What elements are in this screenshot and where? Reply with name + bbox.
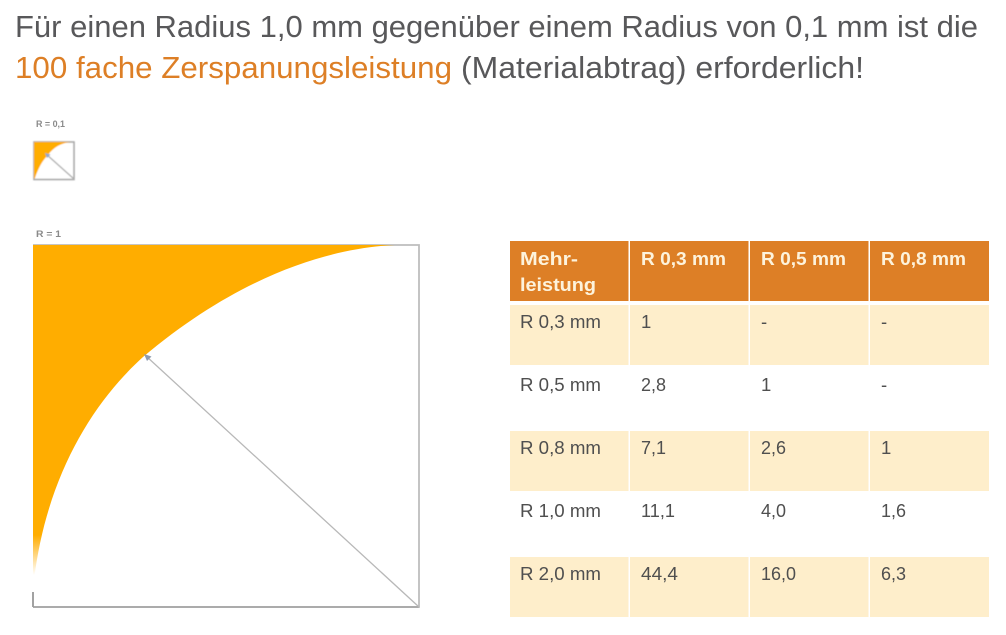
row R 0,5 mm: 2,8 — [641, 374, 666, 395]
row R 1,0 mm: 4,0 — [761, 500, 786, 521]
row R 2,0 mm: 16,0 — [761, 563, 796, 584]
row R 2,0 mm — [510, 557, 989, 617]
row R 0,8 mm: 2,6 — [761, 437, 786, 458]
table header row: Mehr- — [520, 248, 578, 269]
small diagram: R = 0,1 — [34, 119, 74, 180]
table header row: leistung — [520, 274, 596, 295]
row R 2,0 mm: 44,4 — [641, 563, 678, 584]
row R 0,5 mm: 1 — [761, 374, 771, 395]
row R 0,5 mm: R 0,5 mm — [520, 374, 601, 395]
row R 0,8 mm: 1 — [881, 437, 891, 458]
row R 1,0 mm: R 1,0 mm — [520, 500, 601, 521]
row R 0,3 mm: R 0,3 mm — [520, 311, 601, 332]
row R 0,5 mm — [520, 374, 887, 395]
row R 0,3 mm: 1 — [641, 311, 651, 332]
row R 1,0 mm: 11,1 — [641, 500, 675, 521]
large diagram: R = 1: R = 1 — [36, 229, 62, 240]
title: (Materialabtrag) erforderlich! — [461, 51, 864, 85]
table header row: R 0,3 mm — [641, 248, 726, 269]
row R 2,0 mm: R 2,0 mm — [520, 563, 601, 584]
title: 100 fache Zerspanungsleistung — [15, 51, 452, 85]
table header row: R 0,8 mm — [881, 248, 966, 269]
radius arrow — [144, 354, 419, 607]
row R 0,8 mm: R 0,8 mm — [520, 437, 601, 458]
orange removed-material area — [33, 245, 395, 580]
row R 1,0 mm — [520, 500, 906, 521]
large diagram: R = 1 — [33, 229, 419, 607]
row R 2,0 mm: 6,3 — [881, 563, 906, 584]
small diagram: R = 0,1: R = 0,1 — [36, 119, 65, 129]
row R 0,3 mm: - — [761, 311, 767, 332]
title — [15, 10, 978, 85]
table — [510, 241, 989, 617]
row R 0,8 mm: 7,1 — [641, 437, 666, 458]
row R 0,3 mm: - — [881, 311, 887, 332]
table header row — [510, 241, 989, 301]
row R 0,3 mm — [510, 305, 989, 365]
row R 0,5 mm: - — [881, 374, 887, 395]
title: Für einen Radius 1,0 mm gegenüber einem Radius von 0,1 mm ist die — [15, 10, 978, 44]
row R 0,8 mm — [510, 431, 989, 491]
table header row: R 0,5 mm — [761, 248, 846, 269]
row R 1,0 mm: 1,6 — [881, 500, 906, 521]
